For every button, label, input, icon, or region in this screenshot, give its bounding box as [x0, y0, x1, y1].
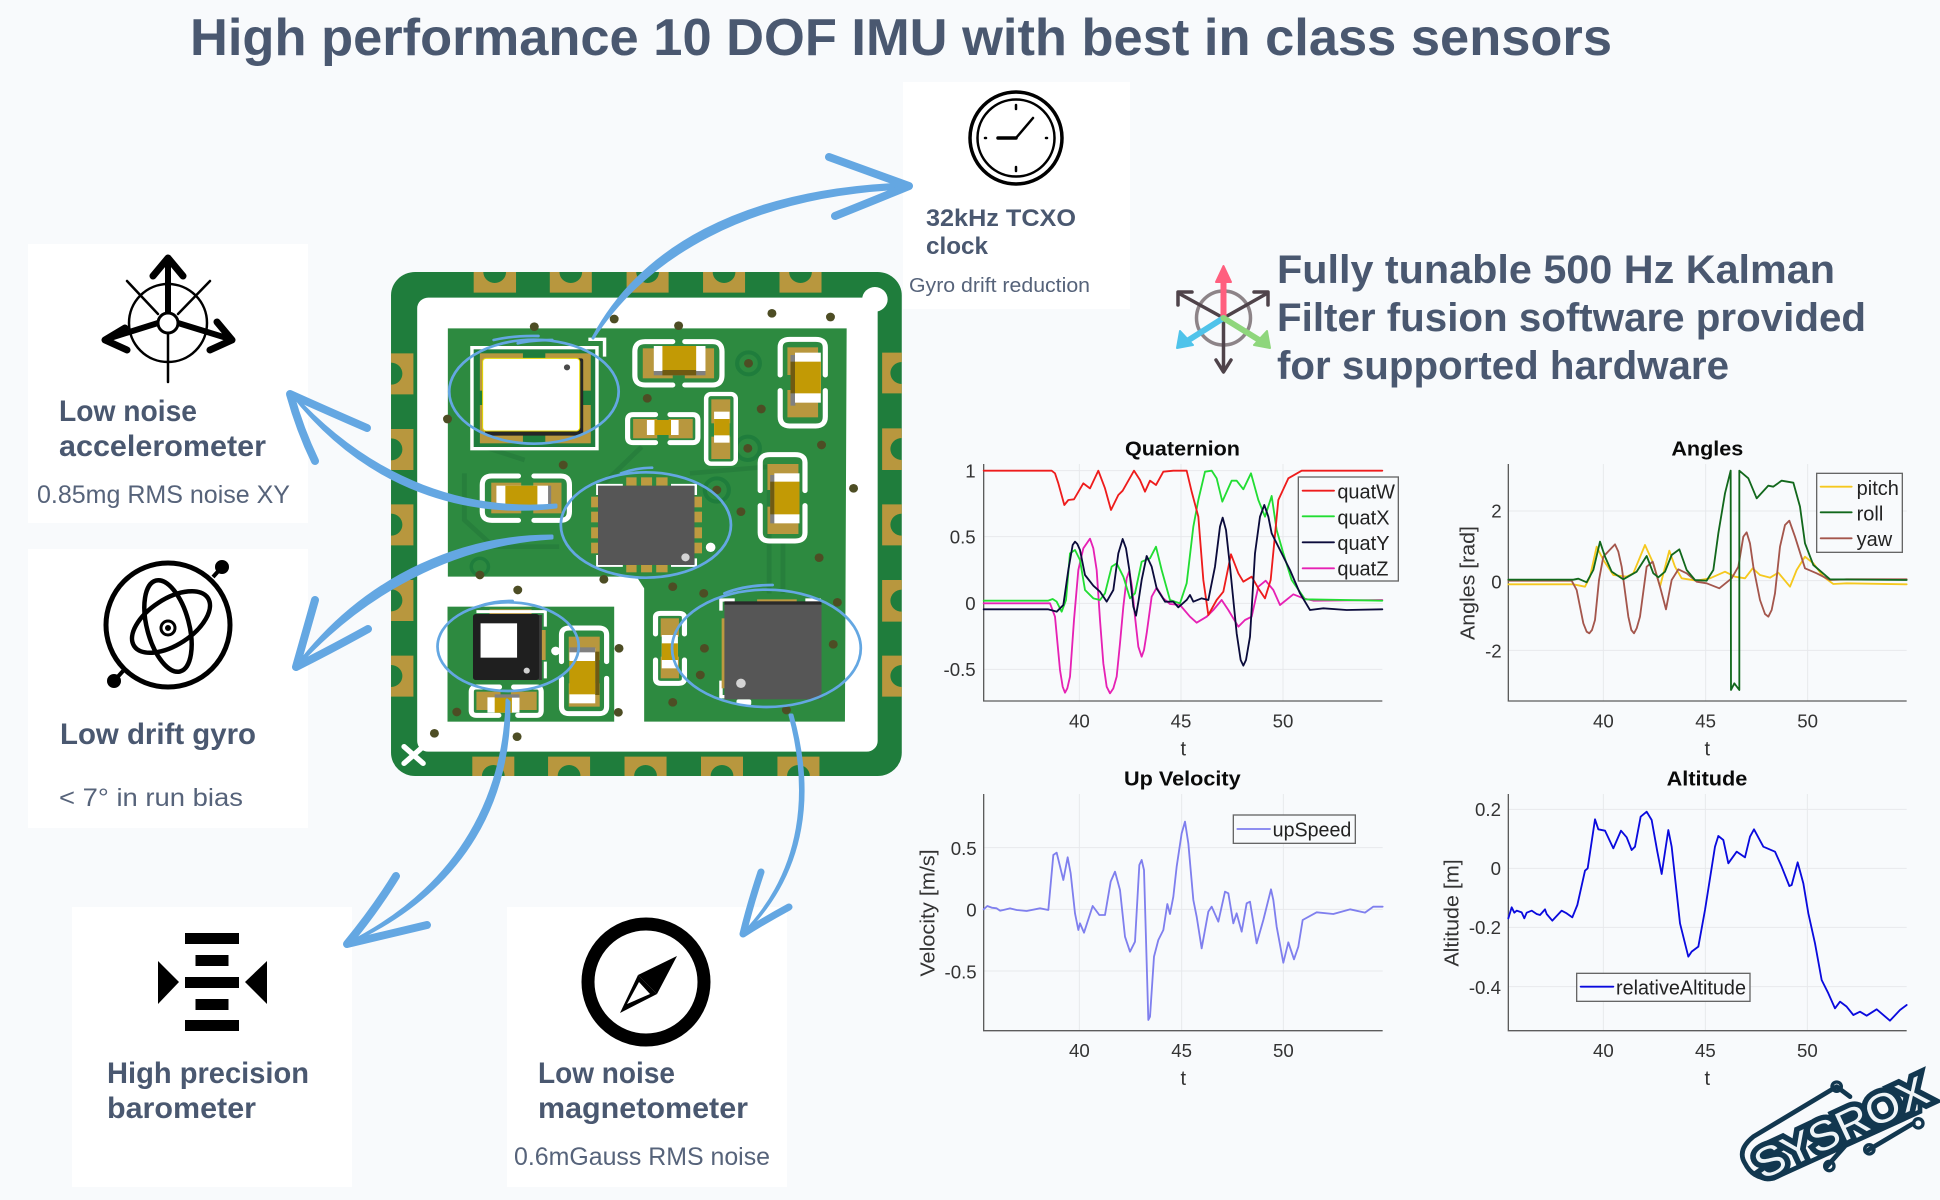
- panel: barometer: [72, 907, 352, 1187]
- component: capacitor left: [482, 476, 569, 520]
- heading: magnetometer: magnetometer: [538, 1092, 748, 1125]
- vias: [430, 309, 858, 741]
- y tick labels: 1: [965, 460, 976, 481]
- y tick labels: -0.4: [1469, 977, 1501, 998]
- text: kalman fusion heading: for supported hardware: [1277, 344, 1729, 388]
- x tick labels: 50: [1273, 711, 1293, 732]
- y tick labels: -0.2: [1469, 917, 1501, 938]
- heading: up velocity: Up Velocity: [1124, 768, 1241, 791]
- heading: accelerometer: Low noise: [59, 395, 197, 428]
- legend: relativeAltitude: [1616, 978, 1746, 1000]
- x tick labels: t: [1181, 739, 1187, 761]
- component: small resistor: [628, 415, 698, 443]
- chart: up velocity: [917, 768, 1383, 1090]
- x tick labels: 40: [1069, 1040, 1090, 1061]
- component: capacitor top right: [780, 339, 825, 426]
- series: quatZ: [984, 539, 1382, 693]
- component: barometer chip: [473, 609, 560, 680]
- x tick labels: 45: [1695, 711, 1716, 732]
- panel: gyro: [28, 549, 308, 828]
- legend: upSpeed: [1273, 820, 1351, 842]
- series: upSpeed: [984, 822, 1383, 1020]
- x tick labels: t: [1705, 739, 1711, 761]
- legend: [1817, 473, 1902, 552]
- heading: clock: clock: [926, 233, 989, 260]
- legend: pitch: [1857, 478, 1899, 500]
- text: magnetometer spec: 0.6mGauss RMS noise: [514, 1143, 770, 1171]
- x tick labels: 40: [1593, 711, 1614, 732]
- heading: barometer: High precision: [107, 1057, 309, 1090]
- legend: [1577, 973, 1750, 1001]
- icon: compass: [588, 924, 704, 1040]
- arrow: to barometer: [347, 700, 509, 944]
- legend: [1298, 477, 1398, 581]
- y tick labels: [1469, 799, 1501, 998]
- heading: clock: 32kHz TCXO: [926, 205, 1076, 232]
- icon: clock: [970, 92, 1062, 184]
- logo: Syrox: SYSROX: [1747, 1067, 1935, 1188]
- arrow: to accelerometer: [290, 394, 556, 509]
- series: pitch: [1508, 545, 1907, 587]
- y tick labels: 0: [1491, 858, 1501, 879]
- x tick labels: t: [1705, 1068, 1711, 1090]
- series: quatY: [984, 505, 1382, 666]
- y tick labels: -0.5: [944, 659, 976, 680]
- series: quatW: [984, 471, 1382, 615]
- heading: quaternion: Quaternion: [1125, 438, 1240, 461]
- title: High performance 10 DOF IMU with best in class sensors: [190, 9, 1612, 67]
- heading: magnetometer: Low noise: [538, 1057, 675, 1090]
- y tick labels: -2: [1485, 640, 1502, 661]
- arrow: to clock: [593, 157, 909, 338]
- x tick labels: 40: [1069, 711, 1090, 732]
- icon: barometer: [158, 933, 267, 1031]
- silkscreen: [404, 287, 888, 763]
- legend: roll: [1857, 504, 1883, 526]
- x tick labels: [1593, 711, 1818, 761]
- series: quatX: [984, 471, 1382, 612]
- icon: kalman axes: [1177, 266, 1270, 372]
- text: clock spec: Gyro drift reduction: [909, 275, 1090, 297]
- component: capacitor right: [760, 455, 805, 541]
- y tick labels: 0.5: [951, 838, 977, 859]
- x tick labels: [1069, 711, 1293, 761]
- y tick labels: 0: [1491, 571, 1502, 592]
- panel: magnetometer: [507, 907, 787, 1187]
- chart: altitude: [1441, 768, 1907, 1090]
- x tick labels: 45: [1695, 1040, 1716, 1061]
- x tick labels: 45: [1171, 711, 1191, 732]
- x tick labels: 50: [1797, 711, 1818, 732]
- heading: altitude: Altitude: [1667, 768, 1747, 791]
- circuit board: [391, 272, 902, 776]
- x tick labels: 45: [1171, 1040, 1192, 1061]
- castellated pads: [391, 272, 902, 776]
- chart: angles: [1457, 438, 1907, 761]
- icon: accelerometer axes: [105, 258, 232, 382]
- x tick labels: 40: [1593, 1040, 1614, 1061]
- y tick labels: 0.5: [950, 526, 976, 547]
- heading: accelerometer: accelerometer: [59, 430, 266, 463]
- component: capacitor lower: [561, 628, 607, 714]
- legend: quatX: [1337, 507, 1390, 529]
- legend: yaw: [1857, 529, 1893, 551]
- y tick labels: [945, 838, 977, 982]
- text: accelerometer spec: 0.85mg RMS noise XY: [37, 481, 290, 509]
- x tick labels: [1069, 1040, 1294, 1090]
- component: main IMU chip: [591, 477, 715, 572]
- callout rings: [438, 336, 861, 707]
- y tick labels: 0: [965, 593, 976, 614]
- component: capacitor top: [635, 342, 722, 385]
- component: small resistor below: [471, 687, 541, 715]
- panel: clock: [903, 82, 1130, 309]
- y tick labels: 0: [966, 900, 977, 921]
- series: relativeAltitude: [1508, 812, 1907, 1021]
- component: TCXO oscillator: [472, 339, 605, 449]
- y tick labels: [944, 460, 976, 680]
- text: kalman fusion heading: Filter fusion software provided: [1277, 296, 1866, 340]
- text: gyro spec: < 7° in run bias: [59, 784, 243, 812]
- y axis label: Altitude [m]: [1441, 859, 1463, 967]
- chart: quaternion: [944, 438, 1398, 761]
- arrow: to magnetometer: [743, 715, 803, 934]
- series: roll: [1508, 471, 1907, 690]
- x tick labels: 50: [1273, 1040, 1294, 1061]
- component: magnetometer chip: [721, 599, 822, 705]
- x tick labels: [1593, 1040, 1818, 1090]
- x tick labels: t: [1181, 1068, 1187, 1090]
- legend: quatW: [1337, 482, 1395, 504]
- icon: gyroscope: [106, 560, 230, 688]
- legend: [1233, 815, 1355, 843]
- heading: angles: Angles: [1671, 438, 1743, 461]
- y tick labels: -0.5: [945, 961, 977, 982]
- y axis label: Velocity [m/s]: [917, 849, 939, 977]
- arrow: to gyro: [296, 536, 552, 667]
- heading: gyro: Low drift gyro: [60, 718, 256, 751]
- x tick labels: 50: [1797, 1040, 1818, 1061]
- y axis label: Angles [rad]: [1457, 526, 1479, 640]
- text: kalman fusion heading: Fully tunable 500 Hz Kalman: [1277, 248, 1835, 292]
- component: vertical resistor lower: [656, 613, 684, 683]
- legend: quatY: [1337, 533, 1390, 555]
- series: yaw: [1508, 521, 1907, 633]
- component: small vertical resistor: [706, 394, 736, 464]
- heading: barometer: barometer: [107, 1092, 256, 1125]
- panel: accelerometer: [28, 244, 308, 523]
- y tick labels: [1485, 501, 1502, 661]
- legend: quatZ: [1337, 559, 1388, 581]
- y tick labels: 0.2: [1475, 799, 1501, 820]
- y tick labels: 2: [1491, 501, 1502, 522]
